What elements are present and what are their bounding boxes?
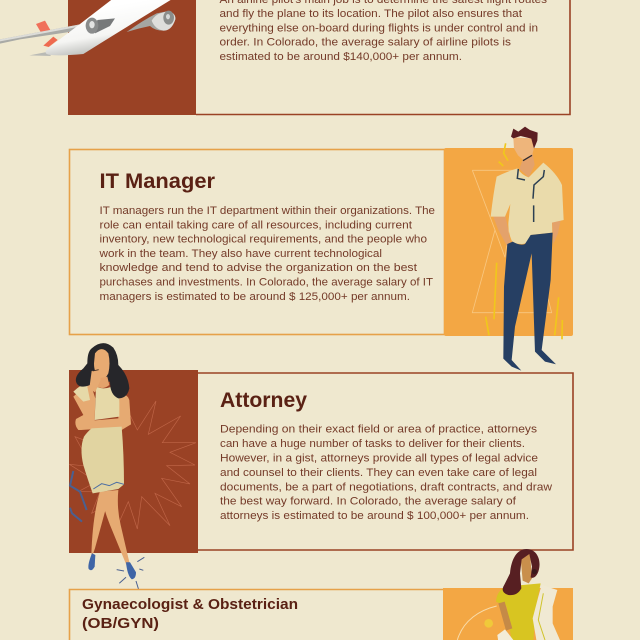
illustration: man in shirt and navy trousers: [472, 127, 564, 371]
text block: attorney description: can have a huge number of tasks to deliver for their clients.: [220, 438, 525, 450]
heading: IT Manager: IT Manager: [100, 170, 215, 193]
text block: airline pilot description: [220, 0, 547, 63]
text block: airline pilot description: estimated to be around $140,000+ per annum.: [220, 51, 462, 63]
text block: attorney description: [220, 424, 553, 522]
text block: attorney description: the best way forward. In Colorado, the average salary of: [220, 496, 517, 508]
text block: IT manager description: IT managers run the IT department within their organizations. The: [100, 205, 435, 217]
text block: IT manager description: managers is estimated to be around $ 125,000+ per annum.: [100, 291, 410, 303]
text block: attorney description: Depending on their exact field or area of practice, attorneys: [220, 424, 537, 436]
panel: airline pilot: [0, 0, 570, 115]
text block: attorney description: However, in a gist, attorneys provide all types of legal advice: [220, 452, 538, 464]
text block: IT manager description: [98, 205, 435, 303]
text block: IT manager description: purchases and investments. In Colorado, the average salary of IT: [100, 276, 433, 288]
text block: attorney description: and counsel to their clients. They can even take care of legal: [220, 467, 537, 479]
heading: Gynaecologist & Obstetrician (OB/GYN): Gynaecologist & Obstetrician: [82, 597, 298, 613]
text block: IT manager description: inventory, new technological requirements, and the people who: [100, 234, 427, 246]
text block: IT manager description: role can entail taking care of all resources, including current: [100, 219, 413, 231]
heading: Gynaecologist & Obstetrician (OB/GYN): (OB/GYN): [82, 616, 159, 632]
heading: Gynaecologist & Obstetrician (OB/GYN): [82, 597, 298, 632]
text block: attorney description: attorneys is estimated to be around $ 100,000+ per annum.: [220, 510, 529, 522]
illustration: woman in yellow top: [457, 549, 561, 640]
text block: IT manager description: knowledge and tend to advise the organization on the best: [100, 262, 418, 274]
text block: IT manager description: work in the team. They also have current technological: [98, 248, 382, 260]
icon: airplane: [0, 0, 175, 56]
panel: IT manager: [70, 127, 573, 371]
text block: attorney description: documents, be a part of negotiations, draft contracts, and draw: [220, 481, 553, 493]
text block: airline pilot description: order. In Colorado, the average salary of airline pilots is: [220, 37, 511, 49]
panel: attorney: [69, 343, 573, 590]
text block: airline pilot description: and fly the plane to its location. The pilot also ensures that: [220, 8, 523, 20]
panel: gynaecologist and obstetrician: [70, 549, 573, 640]
illustration: woman in cream dress: [69, 343, 196, 590]
heading: Attorney: Attorney: [220, 389, 307, 412]
text block: airline pilot description: everything else on-board during flights is under control and in: [220, 22, 538, 34]
